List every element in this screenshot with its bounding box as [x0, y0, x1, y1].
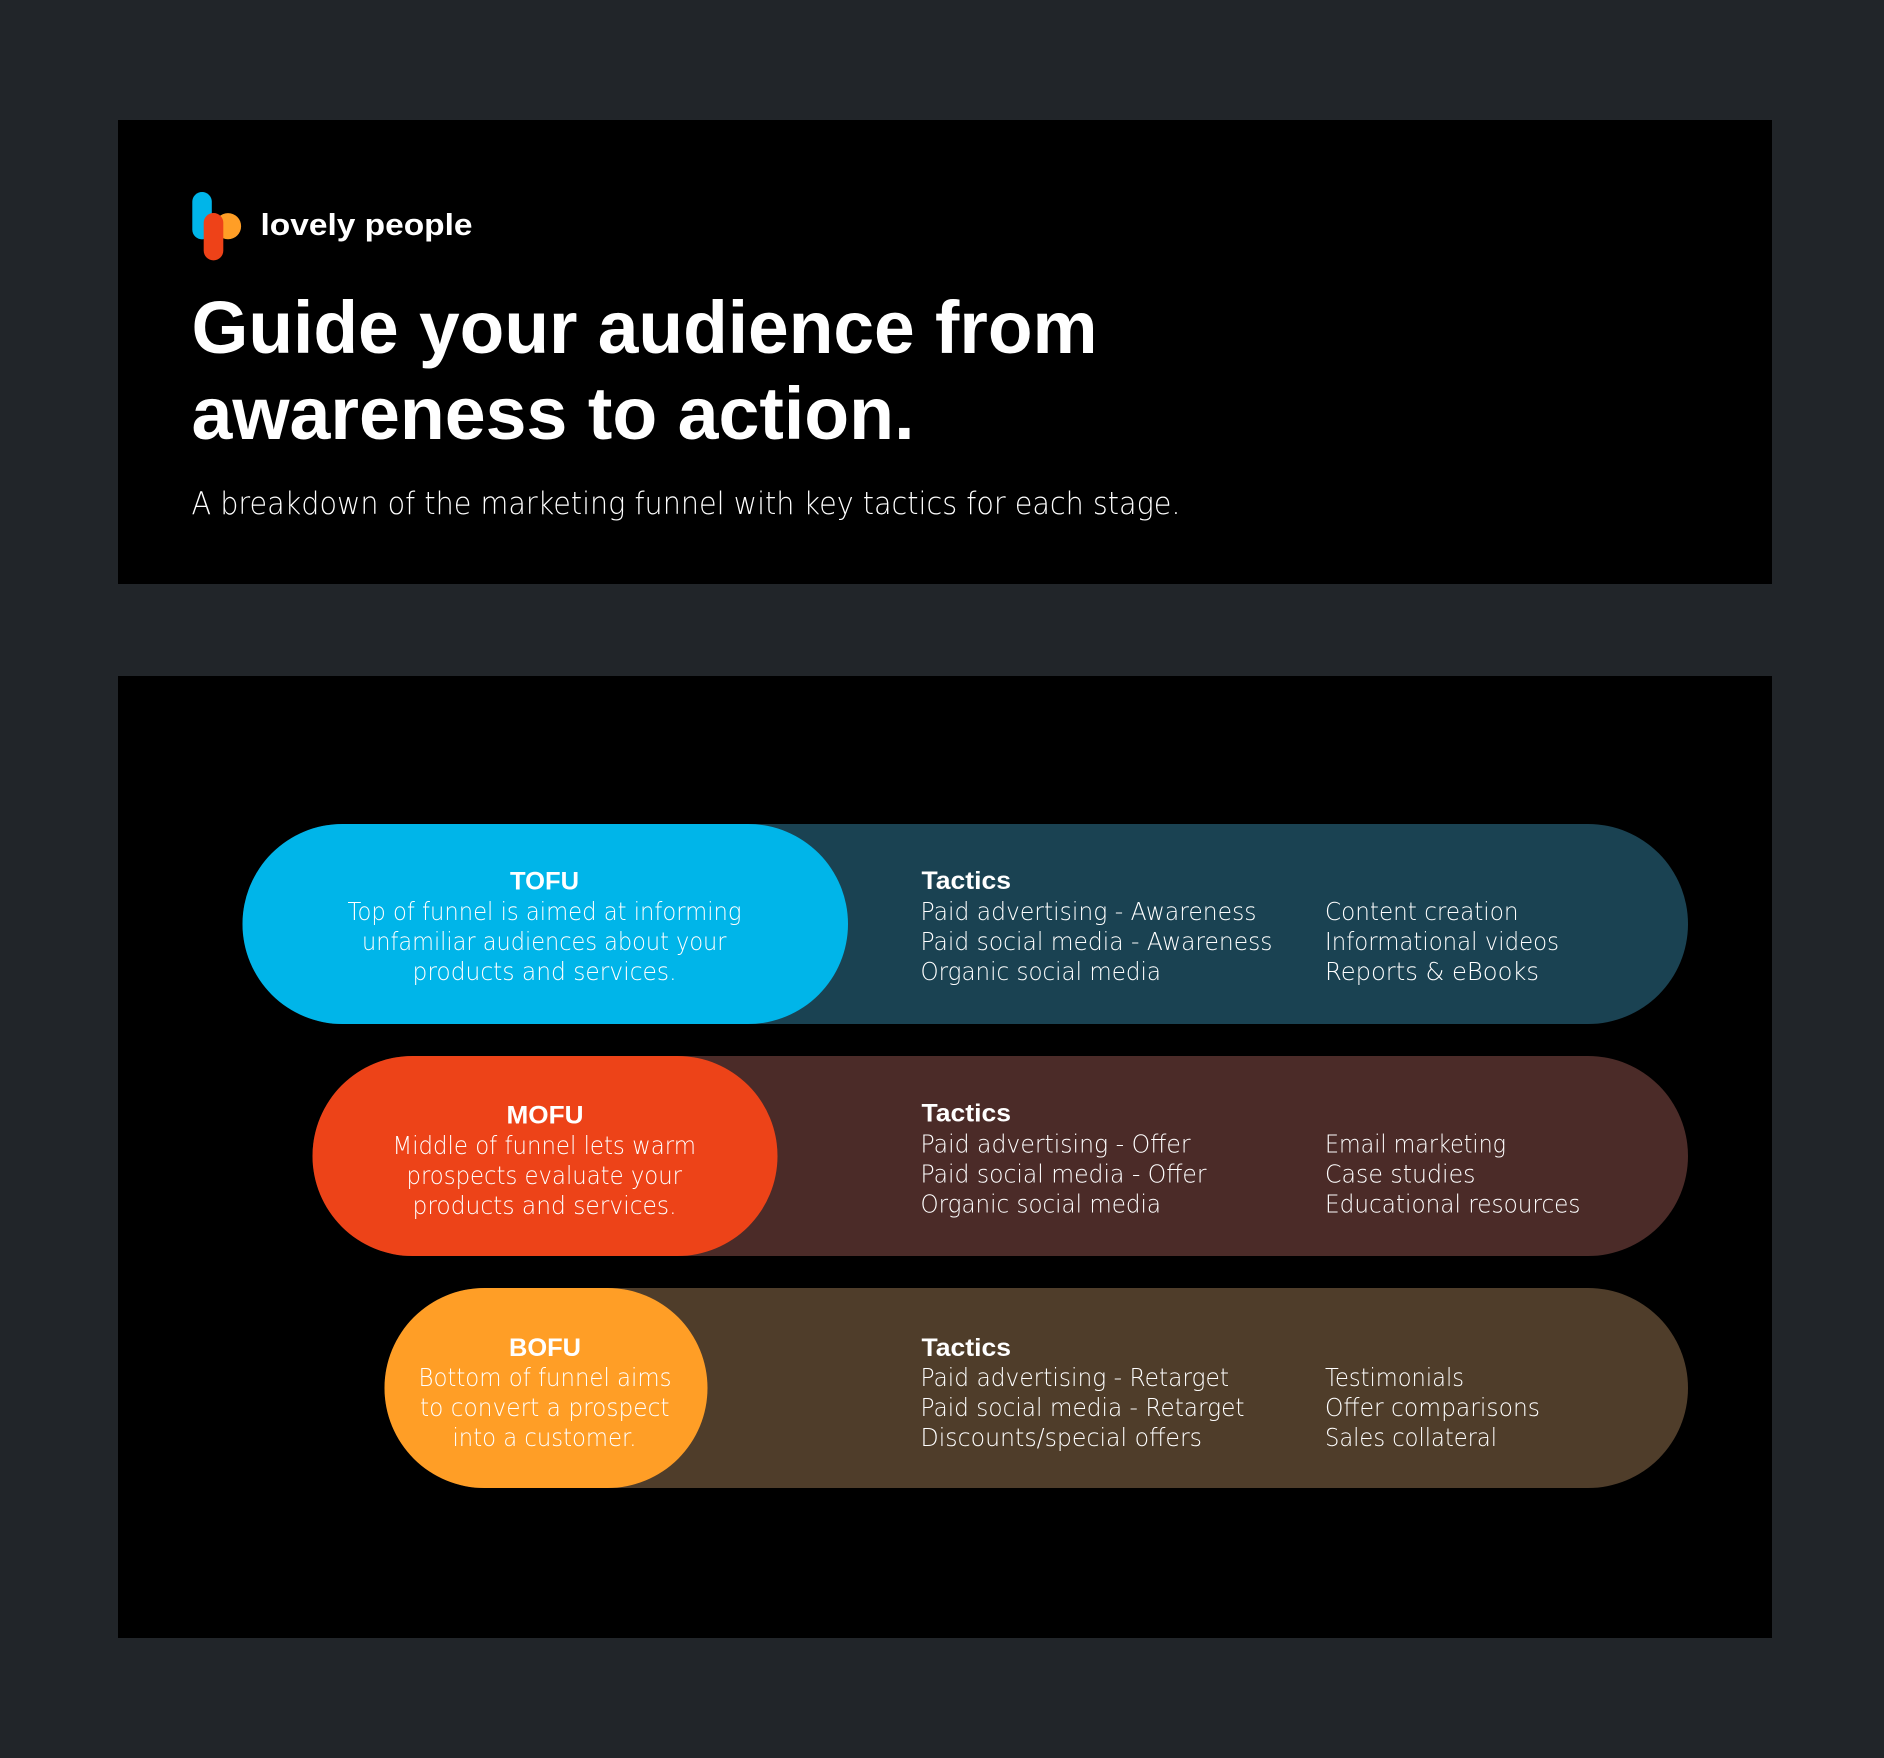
tactics: TOFU: Paid social media - Awareness [920, 927, 1272, 956]
title: Guide your audience from [192, 286, 1098, 369]
tactics: BOFU: Tactics [922, 1334, 1011, 1362]
tactics: TOFU: Organic social media [920, 957, 1161, 986]
row: TOFU [242, 824, 1688, 1024]
stage pill: MOFU [312, 1056, 778, 1256]
tactics: BOFU: Testimonials [1325, 1363, 1464, 1392]
tactics: MOFU: Paid advertising - Offer [920, 1130, 1191, 1158]
stage pill: BOFU: Bottom of funnel aims [418, 1363, 672, 1392]
tactics: TOFU: Content creation [1325, 897, 1518, 926]
tactics: MOFU: Organic social media [920, 1190, 1161, 1218]
tactics: BOFU: Sales collateral [1325, 1423, 1497, 1452]
stage pill: BOFU: to convert a prospect [420, 1393, 670, 1422]
tactics: BOFU: Paid advertising - Retarget [920, 1363, 1229, 1392]
tactics: MOFU: Paid social media - Offer [920, 1160, 1207, 1188]
panel: funnel [118, 676, 1772, 1638]
tactics: BOFU [920, 1334, 1540, 1452]
stage pill: MOFU: products and services. [412, 1191, 676, 1220]
stage pill: TOFU: products and services. [412, 957, 676, 986]
tactics: TOFU: Paid advertising - Awareness [920, 897, 1256, 926]
stage pill: BOFU: into a customer. [452, 1423, 636, 1452]
tactics: TOFU: Informational videos [1325, 927, 1559, 956]
row: MOFU [312, 1056, 1688, 1256]
tactics track: MOFU [312, 1056, 1688, 1256]
logo wordmark: lovely people [260, 207, 472, 242]
stage pill: TOFU [242, 824, 848, 1024]
stage pill: TOFU: TOFU [510, 868, 579, 896]
tactics track: BOFU [384, 1288, 1688, 1488]
stage pill: TOFU: unfamiliar audiences about your [362, 927, 727, 956]
stage pill: BOFU [384, 1288, 708, 1488]
tactics: BOFU: Paid social media - Retarget [920, 1393, 1244, 1422]
stage pill: MOFU: Middle of funnel lets warm [392, 1131, 696, 1160]
tactics: BOFU: Discounts/special offers [920, 1423, 1202, 1452]
tactics: TOFU [920, 867, 1559, 986]
stage pill: MOFU: prospects evaluate your [406, 1161, 683, 1190]
row: BOFU [384, 1288, 1688, 1488]
title [192, 286, 1098, 455]
icon: lovely people logo [192, 192, 241, 260]
tactics: MOFU: Email marketing [1325, 1130, 1506, 1158]
title: awareness to action. [192, 372, 914, 455]
stage pill: BOFU: BOFU [509, 1334, 581, 1362]
stage pill: MOFU: MOFU [506, 1102, 584, 1130]
tactics: MOFU [920, 1100, 1580, 1218]
tactics: MOFU: Tactics [922, 1100, 1011, 1128]
tactics: BOFU: Offer comparisons [1325, 1393, 1540, 1422]
tactics: TOFU: Reports & eBooks [1325, 957, 1539, 986]
tactics: MOFU: Educational resources [1325, 1190, 1580, 1218]
stage pill: TOFU: Top of funnel is aimed at informing [348, 897, 742, 926]
tactics track: TOFU [242, 824, 1688, 1024]
tactics: MOFU: Case studies [1325, 1160, 1476, 1188]
subtitle: A breakdown of the marketing funnel with key tactics for each stage. [192, 486, 1180, 522]
panel: header [118, 120, 1772, 584]
tactics: TOFU: Tactics [922, 867, 1011, 895]
